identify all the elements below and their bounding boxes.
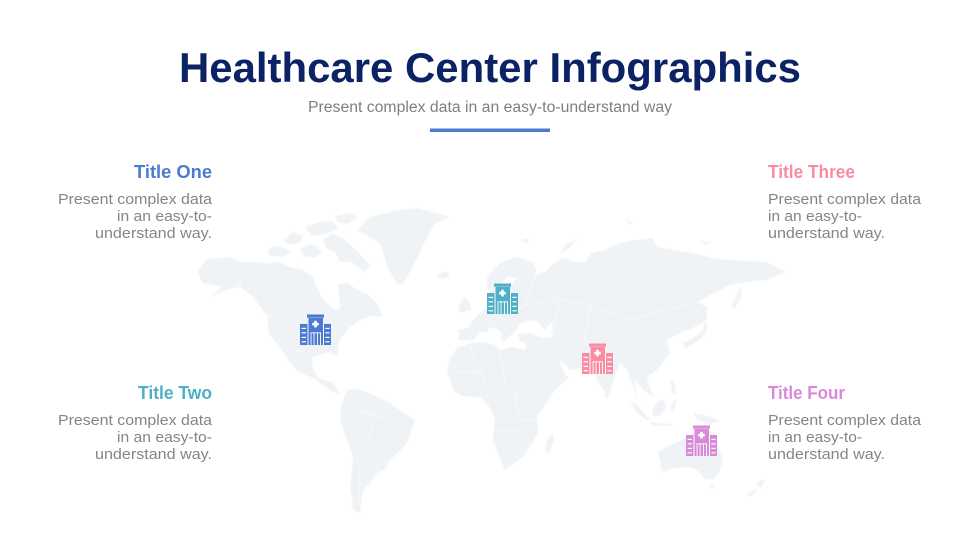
body: Title Four bbox=[768, 412, 922, 463]
icon: hospital teal bbox=[487, 284, 518, 314]
body: Title Two: understand way. bbox=[95, 446, 212, 463]
icon: hospital violet bbox=[686, 426, 717, 456]
heading: Title Two: Title Two bbox=[138, 383, 212, 403]
body: Title Three: understand way. bbox=[768, 225, 885, 242]
text block: Title Four bbox=[768, 383, 922, 463]
map: North America bbox=[197, 257, 383, 395]
map: UK and Ireland bbox=[458, 297, 471, 313]
map: South America bbox=[340, 389, 415, 513]
map: Arctic islands bbox=[267, 213, 370, 272]
text block: Title One bbox=[58, 162, 213, 242]
body: Title Four: in an easy-to- bbox=[768, 429, 862, 446]
heading: Title Three: Title Three bbox=[768, 162, 855, 182]
map: Sri Lanka bbox=[604, 392, 608, 398]
body: Title Three: Present complex data bbox=[768, 191, 922, 208]
subtitle: Present complex data in an easy-to-understand way bbox=[308, 99, 672, 116]
body: Title One: in an easy-to- bbox=[117, 208, 212, 225]
map: Eurasia bbox=[458, 238, 785, 397]
body: Title One: understand way. bbox=[95, 225, 212, 242]
map: Madagascar bbox=[545, 433, 554, 453]
body: Title One: Present complex data bbox=[58, 191, 213, 208]
map: Africa bbox=[447, 342, 555, 470]
world map bbox=[197, 208, 785, 513]
map: New Zealand bbox=[747, 479, 765, 497]
map: Northern islands bbox=[520, 218, 712, 253]
body: Title Two: in an easy-to- bbox=[117, 429, 212, 446]
map: Indonesia bbox=[630, 399, 720, 426]
body: Title Three: in an easy-to- bbox=[768, 208, 862, 225]
heading: Title Four: Title Four bbox=[768, 383, 845, 403]
title underline bbox=[430, 128, 550, 132]
text block: Title Two bbox=[58, 383, 213, 463]
icon: hospital pink bbox=[582, 344, 613, 374]
map: Greenland bbox=[357, 208, 450, 285]
map: Japan and Sakhalin bbox=[683, 286, 742, 349]
body: Title Four: understand way. bbox=[768, 446, 885, 463]
title: Healthcare Center Infographics bbox=[179, 44, 801, 91]
map: Iceland bbox=[438, 271, 450, 279]
map: Philippines bbox=[670, 378, 676, 396]
map: country borders bbox=[240, 262, 690, 505]
text block: Title Three bbox=[768, 162, 922, 242]
map: Australia bbox=[658, 430, 723, 480]
body: Title Four: Present complex data bbox=[768, 412, 922, 429]
icon: hospital blue bbox=[300, 314, 331, 345]
heading: Title One: Title One bbox=[134, 162, 212, 182]
body: Title Three bbox=[768, 191, 922, 242]
map: Tasmania bbox=[708, 485, 714, 490]
body: Title One bbox=[58, 191, 213, 242]
body: Title Two: Present complex data bbox=[58, 412, 213, 429]
body: Title Two bbox=[58, 412, 213, 463]
